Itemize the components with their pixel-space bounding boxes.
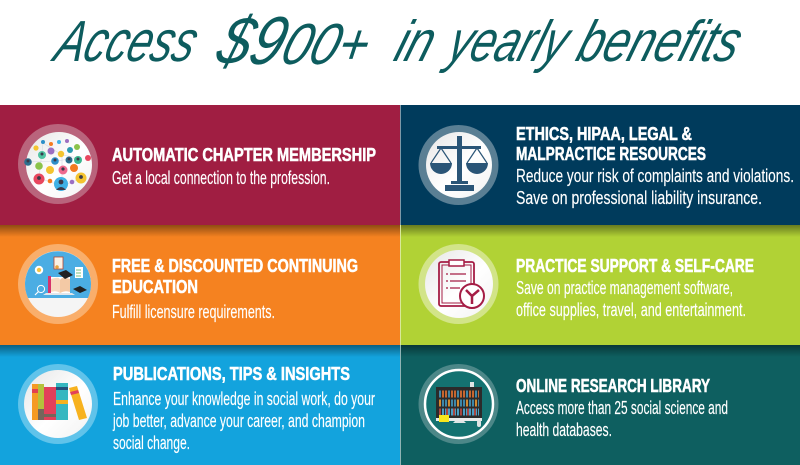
title bbox=[46, 3, 751, 79]
description: Get a local connection to the profession. bbox=[112, 167, 330, 188]
description: job better, advance your career, and champion bbox=[112, 410, 365, 431]
heading: ONLINE RESEARCH LIBRARY bbox=[516, 376, 710, 396]
icon: laptop and graduation cap bbox=[18, 244, 98, 324]
description: Enhance your knowledge in social work, do your bbox=[113, 388, 375, 409]
description bbox=[112, 388, 375, 453]
panel: online research library bbox=[400, 345, 800, 465]
panel: publications, tips and insights bbox=[0, 345, 400, 465]
title: in bbox=[388, 8, 445, 74]
panel: automatic chapter membership bbox=[0, 105, 400, 225]
panel: practice support and self-care bbox=[400, 225, 800, 345]
heading line one: FREE & DISCOUNTED CONTINUING bbox=[112, 256, 358, 276]
icon: books bbox=[18, 364, 98, 444]
description: Fulfill licensure requirements. bbox=[112, 301, 275, 322]
description: health databases. bbox=[516, 419, 612, 440]
description bbox=[516, 397, 728, 440]
icon: people network bbox=[18, 124, 98, 204]
title: Access bbox=[46, 8, 207, 74]
description: social change. bbox=[113, 432, 190, 453]
icon: scales of justice bbox=[418, 125, 498, 205]
panel: ethics and legal resources bbox=[400, 105, 800, 225]
icon: computer with bookshelf bbox=[418, 364, 498, 444]
title: benefits bbox=[570, 8, 751, 74]
heading line one: ETHICS, HIPAA, LEGAL & bbox=[516, 124, 692, 144]
heading line two: EDUCATION bbox=[112, 277, 198, 297]
heading: PUBLICATIONS, TIPS & INSIGHTS bbox=[113, 364, 350, 384]
icon: clipboard with yoga figure bbox=[418, 244, 498, 324]
title: yearly bbox=[438, 8, 580, 74]
heading line two: MALPRACTICE RESOURCES bbox=[516, 144, 706, 164]
heading: AUTOMATIC CHAPTER MEMBERSHIP bbox=[112, 145, 376, 165]
title: $900+ bbox=[207, 3, 383, 79]
description bbox=[516, 277, 746, 320]
panel: continuing education bbox=[0, 225, 400, 345]
description bbox=[516, 165, 794, 208]
